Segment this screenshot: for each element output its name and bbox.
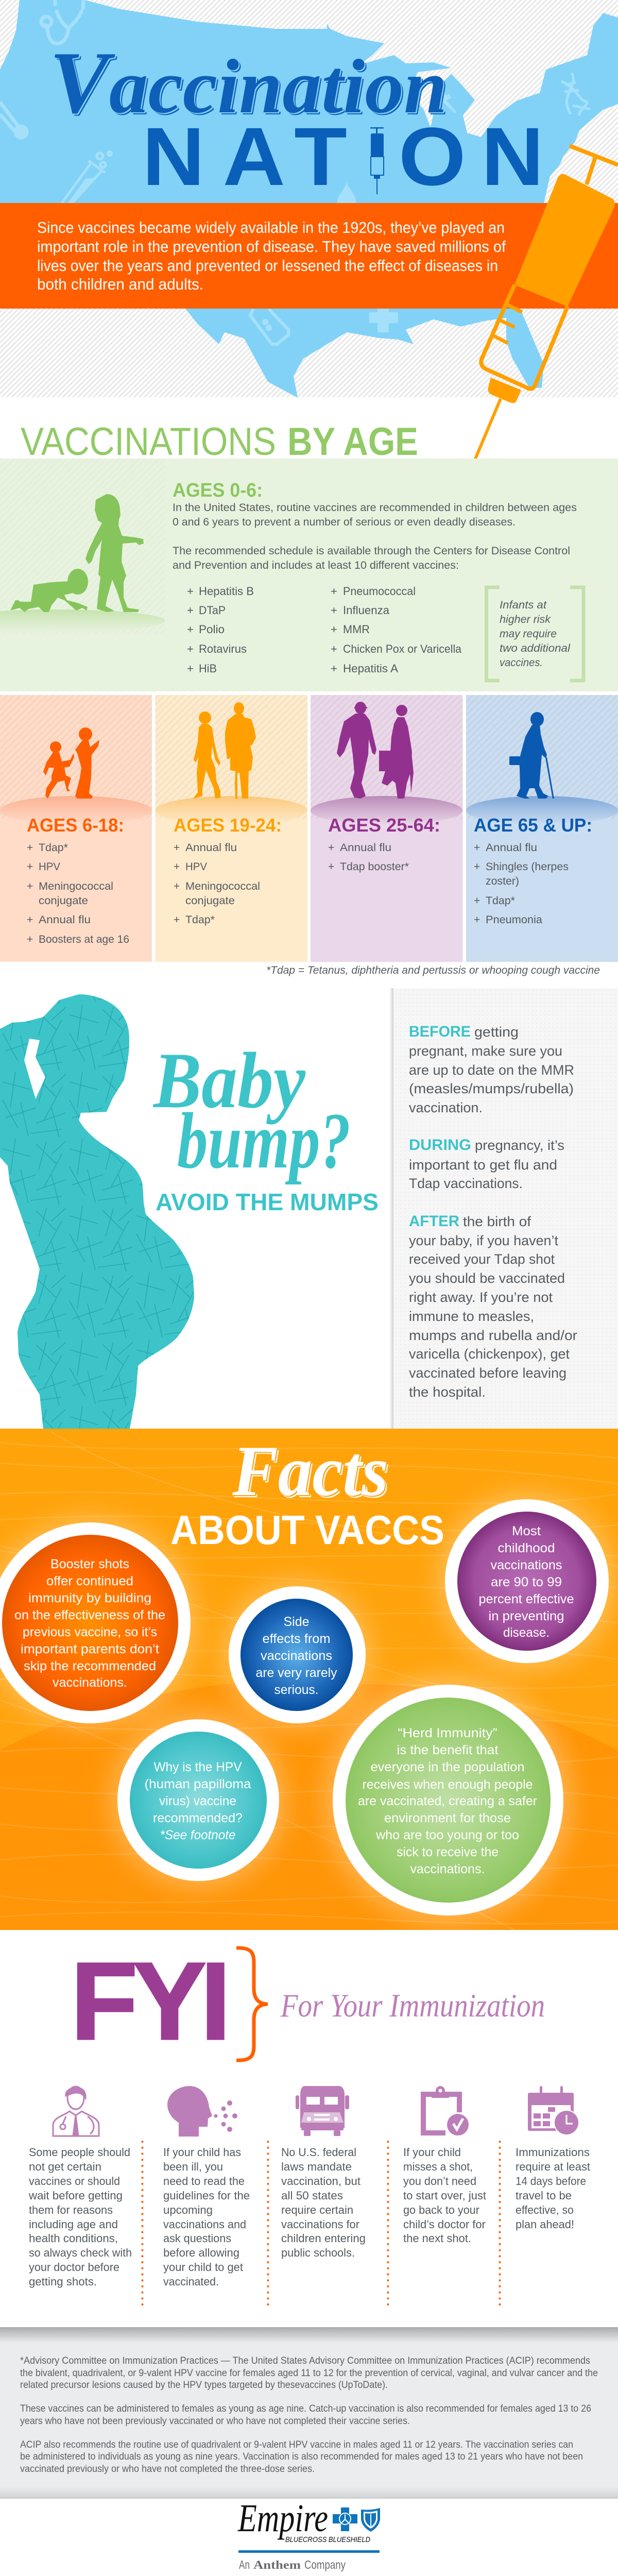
fact circle: side effects: serious. (274, 1683, 318, 1697)
fact circle: effectiveness: in preventing (488, 1609, 564, 1623)
advice: during: Tdap vaccinations. (409, 1176, 523, 1191)
advice: before: BEFORE (409, 1023, 471, 1040)
advice: after: right away. If you’re not (409, 1290, 553, 1305)
heading: AGES 6-18: (27, 815, 124, 836)
panel: HPV footnote: be administered to individuals as young as nine years. Vaccination is also recommended for males aged 13 to 21 years who have not been (20, 2451, 583, 2462)
subheading: AVOID THE MUMPS (156, 1189, 379, 1215)
vaccine list: Rotavirus (199, 642, 247, 655)
fact circle: booster shots (0, 1522, 191, 1723)
FYI text: column 2: need to read the (163, 2175, 245, 2188)
heading: AGES 19-24: (174, 815, 282, 836)
hill (466, 796, 618, 825)
FYI text: column 3: public schools. (281, 2246, 355, 2259)
FYI text: column 4: go back to your (403, 2204, 479, 2216)
advice: after: vaccinated before leaving (409, 1365, 566, 1381)
advice: after: received your Tdap shot (409, 1251, 555, 1267)
vaccine list: Annual flu (486, 842, 537, 854)
title (49, 34, 544, 202)
vaccine list: Influenza (343, 604, 390, 617)
FYI text: column 5: effective, so (516, 2204, 574, 2216)
FYI text: column 2: upcoming (163, 2204, 213, 2216)
intro text: and Prevention and includes at least 10 different vaccines: (173, 559, 459, 571)
fact circle: HPV (117, 1719, 279, 1881)
heading: ages 0-6: AGES 0-6: (173, 480, 263, 501)
intro text: lives over the years and prevented or lessened the effect of diseases in (37, 257, 498, 275)
vaccine list (174, 842, 260, 926)
fact circle: effectiveness: childhood (497, 1541, 555, 1555)
fact circle: side effects: Side (283, 1615, 309, 1629)
panel: ages 0-6 (0, 459, 618, 691)
glows (0, 1493, 615, 1924)
panel: HPV footnote: *Advisory Committee on Immunization Practices — The United States Advisory Committee on Immunization Practices (ACIP) recommends (20, 2355, 590, 2366)
section heading: vaccinations by age: BY AGE (287, 420, 418, 464)
vaccine list: + (174, 914, 180, 926)
icon: large syringe (469, 146, 618, 473)
panel: ages 19-24 (156, 695, 307, 962)
fact circle: HPV: *See footnote (160, 1828, 236, 1842)
intro text: both children and adults. (37, 275, 203, 293)
section heading: vaccinations by age: VACCINATIONS (21, 420, 276, 464)
vaccine list: Annual flu (39, 914, 91, 926)
vaccine list: Boosters at age 16 (39, 934, 129, 945)
FYI text: column 5 (516, 2146, 591, 2231)
vaccine list: + (474, 895, 480, 907)
heading: baby bump: Baby (152, 1036, 306, 1125)
vaccine list: Annual flu (185, 842, 237, 854)
heading: baby bump (152, 1036, 379, 1215)
fact circle: herd immunity: who are too young or too (375, 1828, 519, 1842)
icon: medical cross (369, 309, 398, 332)
figure: toddler and baby (10, 494, 144, 612)
vaccine list: conjugate (185, 895, 235, 907)
FYI text: column 1: them for reasons (29, 2204, 113, 2216)
vaccine list: conjugate (39, 895, 88, 907)
vaccine list: + (331, 662, 337, 675)
logo: Empire BlueCross BlueShield: BLUECROSS BLUESHIELD (285, 2535, 370, 2544)
bracket callout: two additional (500, 642, 571, 654)
tagline: an anthem company: Anthem (253, 2558, 301, 2571)
FYI text: column 2: ask questions (163, 2232, 231, 2245)
FYI text: column 4: child’s doctor for (403, 2218, 486, 2231)
vaccine list: + (328, 842, 334, 854)
vaccine list: HPV (39, 861, 60, 873)
fact circle: effectiveness: percent effective (479, 1592, 574, 1606)
figure: young couple (193, 702, 256, 799)
vaccine list: + (27, 842, 33, 854)
intro text: Since vaccines became widely available in the 1920s, they’ve played an (37, 218, 505, 236)
vaccine list: Meningococcal (39, 880, 113, 892)
fact circle: booster shots: offer continued (46, 1574, 133, 1588)
FYI text: column 1: vaccines or should (29, 2175, 120, 2188)
FYI text: column 2: vaccinated. (163, 2275, 219, 2288)
advice: before: pregnant, make sure you (409, 1043, 562, 1059)
vaccine list: Hepatitis A (343, 662, 398, 675)
bracket callout: vaccines. (500, 656, 543, 669)
vaccine list (187, 585, 462, 675)
advice: during (409, 1137, 564, 1191)
FYI text: column 5: travel to be (516, 2189, 572, 2202)
FYI text: column 1: wait before getting (28, 2189, 123, 2202)
fact circle: booster shots: Booster shots (50, 1557, 129, 1571)
advice: after: the birth of (463, 1214, 531, 1229)
panel: facts about vaccs (0, 1429, 618, 1930)
vaccine list: Tdap* (486, 895, 515, 907)
vaccine list: Tdap booster* (340, 861, 409, 873)
icon: clipboard with check (423, 2086, 469, 2136)
panel: HPV footnote: related precursor lesions caused by the HPV types targeted by thesevaccines (UpToDate). (20, 2380, 388, 2391)
FYI text: column 2: If your child has (163, 2146, 241, 2159)
vaccine list: + (174, 861, 180, 873)
advice: after: immune to measles, (409, 1309, 534, 1324)
hill (311, 796, 462, 825)
vaccine list: + (331, 585, 337, 598)
fact circle: booster shots: on the effectiveness of the (14, 1608, 165, 1622)
vaccine list: + (474, 842, 480, 854)
FYI text: column 5: plan ahead! (516, 2218, 574, 2231)
bracket callout: may require (500, 628, 557, 640)
title script line: Vaccination (49, 34, 447, 132)
icon: blue shield (361, 2508, 380, 2532)
vaccine list: + (174, 880, 180, 892)
FYI text: column 3: require certain (281, 2204, 353, 2216)
icon: calendar with clock (528, 2086, 579, 2135)
panel: age 65 and up (466, 695, 618, 962)
FYI text: column 1: getting shots. (29, 2275, 97, 2288)
FYI text: column 3: all 50 states (281, 2189, 343, 2202)
advice: during: pregnancy, it’s (475, 1138, 564, 1153)
intro text: important role in the prevention of disease. They have saved millions of (37, 238, 506, 256)
advice: after: AFTER (409, 1213, 459, 1230)
icon: small syringe (370, 127, 384, 194)
vaccine list: DTaP (199, 604, 226, 617)
fact circle: side effects: are very rarely (255, 1666, 337, 1680)
intro text: 0 and 6 years to prevent a number of serious or even deadly diseases. (173, 516, 516, 528)
vaccine list: HiB (199, 662, 217, 675)
fact circle: effectiveness: vaccinations (490, 1558, 562, 1572)
advice: during: DURING (409, 1137, 471, 1154)
panel: pregnancy advice (389, 988, 618, 1429)
advice: after: your baby, if you haven’t (409, 1233, 558, 1248)
FYI text: column 2: before allowing (163, 2246, 239, 2259)
intro text: In the United States, routine vaccines are recommended in children between ages (173, 501, 577, 514)
fact circle: herd immunity: “Herd Immunity” (398, 1726, 497, 1740)
advice: after: varicella (chickenpox), get (409, 1346, 570, 1362)
vaccine list (328, 842, 409, 873)
footnote: Tdap definition: *Tdap = Tetanus, diphtheria and pertussis or whooping cough vaccine (266, 964, 600, 976)
heading: AGES 25-64: (328, 815, 440, 836)
fact circle: booster shots: skip the recommended (24, 1659, 156, 1673)
advice: before: are up to date on the MMR (409, 1062, 574, 1078)
vaccine list: Tdap* (39, 842, 68, 854)
heading: FYI: FYI (71, 1940, 231, 2063)
vaccine list: Pneumococcal (343, 585, 416, 598)
figure: two children (43, 727, 99, 799)
advice: after: you should be vaccinated (409, 1270, 565, 1286)
vaccine list (474, 842, 569, 926)
icon: blue cross (333, 2507, 357, 2531)
FYI text: column 2: vaccinations and (163, 2218, 246, 2231)
fact circle: side effects (229, 1586, 366, 1723)
intro text: The recommended schedule is available through the Centers for Disease Control (173, 545, 570, 557)
vaccine list (27, 842, 129, 945)
fact circle: side effects: vaccinations (261, 1649, 332, 1663)
advice: before (409, 1023, 574, 1115)
bracket callout: higher risk (500, 613, 551, 625)
hill (0, 609, 165, 632)
vaccine list: Shingles (herpes (486, 861, 569, 873)
icon: water drop (337, 182, 356, 203)
vaccine list: + (331, 623, 337, 636)
FYI text: column 3: laws mandate (281, 2160, 352, 2173)
hill (0, 796, 152, 825)
vaccine list: Tdap* (185, 914, 215, 926)
vaccine list: + (174, 842, 180, 854)
panel: HPV footnote: the bivalent, quadrivalent, or 9-valent HPV vaccine for females aged 11 to 12 for the prevention of cervical, vaginal, and vulvar cancer and the (20, 2368, 598, 2379)
map of the United States (0, 0, 618, 398)
fact circle: booster shots: important parents don’t (21, 1642, 159, 1656)
panel: ages 6-18 (0, 695, 152, 962)
FYI text: column 5: 14 days before (516, 2175, 586, 2188)
vaccine list: + (27, 914, 33, 926)
FYI text: column 2: your child to get (163, 2261, 244, 2274)
fact circle: herd immunity: vaccinations. (410, 1862, 485, 1876)
FYI text: column 4: you don’t need (403, 2175, 476, 2188)
panel: HPV footnote: These vaccines can be administered to females as young as age nine. Catch-up vaccination is also recommended for females aged 13 to 26 (20, 2403, 591, 2414)
fact circle: booster shots: immunity by building (28, 1591, 151, 1605)
fact circle: HPV: recommended? (153, 1811, 243, 1825)
FYI text: column 2 (163, 2146, 250, 2288)
FYI text: column 2: guidelines for the (163, 2189, 250, 2202)
fact circle: herd immunity: are vaccinated, creating a safer (358, 1794, 537, 1808)
FYI text: column 2: been ill, you (163, 2160, 223, 2173)
header background (0, 0, 618, 397)
icon: thermometer (0, 102, 27, 138)
fact circle: HPV: Why is the HPV (153, 1760, 242, 1774)
FYI text: column 1: so always check with (29, 2246, 132, 2259)
vaccine list: HPV (185, 861, 207, 873)
heading: facts: Facts (232, 1431, 388, 1511)
icon: bandage (250, 309, 288, 344)
logo: Empire BlueCross BlueShield: Empire (237, 2497, 328, 2540)
vaccine list: Hepatitis B (199, 585, 254, 598)
advice: after: the hospital. (409, 1384, 486, 1400)
FYI text: column 1: your doctor before (29, 2261, 119, 2274)
FYI text: column 1: not get certain (29, 2160, 101, 2173)
icon: pipette (437, 86, 456, 113)
fact circle: booster shots: vaccinations. (53, 1675, 127, 1690)
brace (236, 1948, 268, 2060)
advice: before: vaccination. (409, 1100, 483, 1115)
panel: HPV footnote: years who have not been previously vaccinated or who have not completed their vaccine series. (20, 2416, 410, 2427)
advice: before: (measles/mumps/rubella) (409, 1081, 574, 1096)
vaccine list: + (187, 642, 194, 655)
figure: pregnant woman silhouette (0, 994, 196, 1429)
intro text (173, 501, 577, 571)
intro orange band (0, 203, 618, 309)
FYI text: column 3 (281, 2146, 366, 2259)
vaccine list: + (187, 585, 194, 598)
fact circle: herd immunity: everyone in the population (371, 1760, 524, 1774)
logo: Empire BlueCross BlueShield (237, 2497, 380, 2571)
vaccine list: + (474, 914, 480, 926)
advice: before: getting (474, 1024, 519, 1040)
vaccine list: + (187, 623, 194, 636)
fact circle: effectiveness: disease. (503, 1625, 550, 1640)
vaccine list: Pneumonia (486, 914, 542, 926)
fact circle: HPV: virus) vaccine (159, 1794, 236, 1808)
tagline: an anthem company: Company (304, 2558, 346, 2571)
bracket callout: Infants at (500, 599, 547, 611)
panel: ages 25-64 (311, 695, 462, 962)
panel: HPV footnote (0, 2327, 618, 2499)
FYI text: column 5: require at least (516, 2160, 591, 2173)
vaccine list: + (27, 861, 33, 873)
advice: after: mumps and rubella and/or (409, 1328, 577, 1343)
FYI text: column 5: Immunizations (516, 2146, 590, 2159)
vaccine list: Meningococcal (185, 880, 260, 892)
heading: AGE 65 & UP: (474, 815, 592, 836)
fact circle: herd immunity: sick to receive the (397, 1845, 499, 1859)
vaccine list: + (27, 934, 33, 945)
FYI text: column 1: Some people should (29, 2146, 130, 2159)
subheading: for your immunization: For Your Immunization (280, 1987, 545, 2024)
FYI text: column 4: the next shot. (403, 2232, 471, 2245)
FYI text: column 4: misses a shot, (403, 2160, 473, 2173)
FYI text: column 3: No U.S. federal (281, 2146, 356, 2159)
tagline: an anthem company: An (239, 2558, 250, 2571)
vaccine list: + (187, 662, 194, 675)
FYI text: column 4 (403, 2146, 487, 2245)
icon: stethoscope (41, 0, 83, 44)
icon: DNA helix (561, 73, 590, 115)
vaccine list: + (331, 642, 337, 655)
vaccine list: + (331, 604, 337, 617)
fact circle: HPV: (human papilloma (144, 1777, 251, 1791)
fact circle: effectiveness: Most (512, 1524, 541, 1538)
FYI text: column 3: vaccination, but (281, 2175, 361, 2188)
vaccine list: + (27, 880, 33, 892)
vaccine list: + (474, 861, 480, 873)
FYI text: column 3: vaccinations for (281, 2218, 359, 2231)
advice: after (409, 1213, 577, 1400)
fact circle: booster shots: previous vaccine, so it’s (23, 1625, 157, 1639)
panel: HPV footnote: vaccinated previously or who have not completed the three-dose series. (20, 2464, 315, 2475)
bracket callout (486, 587, 583, 681)
advice: during: important to get flu and (409, 1157, 557, 1173)
FYI text: column 1: health conditions, (29, 2232, 118, 2245)
heading: about vaccs: ABOUT VACCS (170, 1507, 444, 1553)
fact circle: herd immunity: environment for those (384, 1811, 511, 1825)
fact circle: side effects: effects from (263, 1632, 331, 1646)
icon: school bus (296, 2086, 349, 2136)
vaccine list: Chicken Pox or Varicella (343, 642, 462, 655)
FYI text: column 1: including age and (29, 2218, 118, 2231)
title block line: NAT ION (142, 110, 544, 202)
icon: doctor (53, 2087, 99, 2136)
vaccine list: zoster) (486, 875, 519, 887)
fact circle: effectiveness: are 90 to 99 (491, 1575, 562, 1589)
fact circle: effectiveness (445, 1499, 609, 1663)
vaccine list: Polio (199, 623, 225, 636)
intro text (37, 218, 506, 293)
vaccine list: MMR (343, 623, 370, 636)
figure: middle aged couple (337, 702, 414, 799)
panel: HPV footnote: ACIP also recommends the routine use of quadrivalent or 9-valent HPV vaccine in males aged 11 or 12 years. The vaccination series can (20, 2439, 573, 2450)
vaccine list: + (187, 604, 194, 617)
FYI text: column 1 (28, 2146, 132, 2288)
icon: sneezing head (167, 2086, 237, 2137)
icon: test tube (62, 151, 111, 203)
FYI text: column 4: If your child (403, 2146, 461, 2159)
figure: elderly woman with cane (509, 712, 554, 799)
fact circle: herd immunity: is the benefit that (397, 1743, 499, 1757)
hill (156, 796, 307, 825)
vaccine list: Annual flu (340, 842, 391, 854)
fact circle: herd immunity (333, 1685, 563, 1916)
fact circle: herd immunity: receives when enough people (363, 1777, 533, 1792)
FYI text: column 3: children entering (281, 2232, 366, 2245)
heading: baby bump: bump? (177, 1096, 351, 1185)
vaccine list: + (328, 861, 334, 873)
FYI text: column 4: to start over, just (403, 2189, 487, 2202)
